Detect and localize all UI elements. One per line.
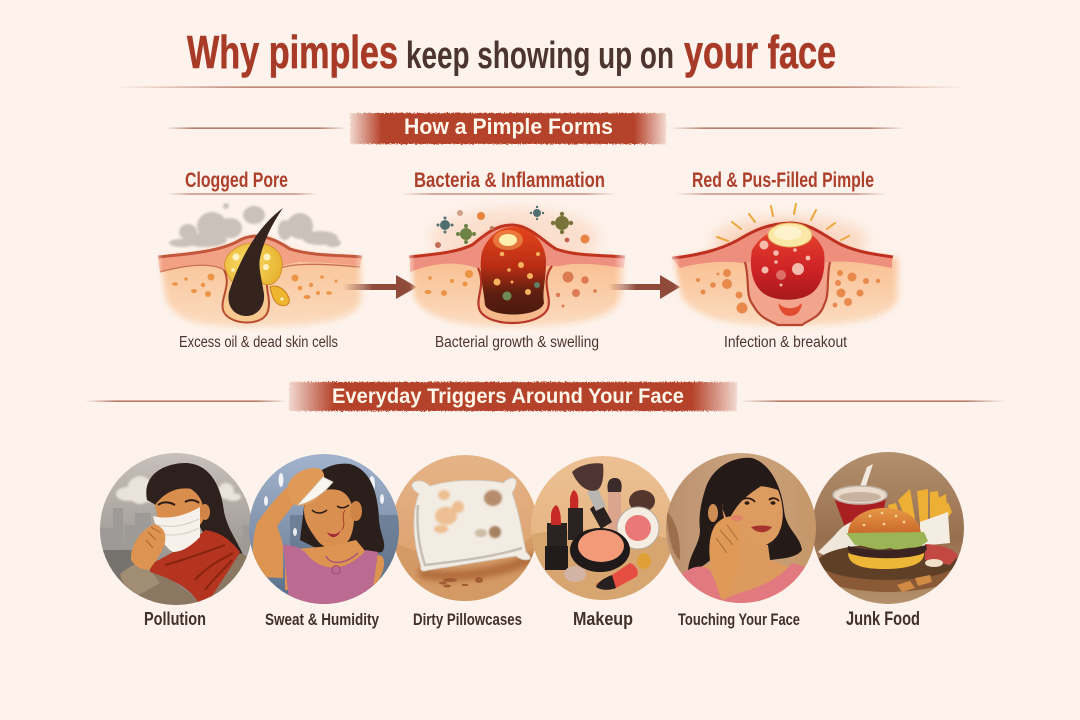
label: Sweat & Humidity <box>265 610 379 629</box>
arrow: bacteria to pimple <box>608 275 680 299</box>
illustration: burger, fries and drink <box>814 452 964 604</box>
section banner: How a Pimple Forms: How a Pimple Forms <box>404 114 613 139</box>
illustration: woman touching her face <box>666 453 816 603</box>
illustration: pus-filled pimple cross-section <box>672 204 900 326</box>
heading: Clogged Pore: Clogged Pore <box>185 169 288 192</box>
label: Junk Food <box>846 609 920 630</box>
section banner: Everyday Triggers Around Your Face <box>85 382 1005 411</box>
section banner: Everyday Triggers Around Your Face: Everyday Triggers Around Your Face <box>332 385 684 408</box>
trigger: touching your face <box>666 453 816 628</box>
title: keep showing up on <box>406 35 674 77</box>
icon: inflammation rays <box>717 204 849 241</box>
trigger: dirty pillowcases <box>396 455 534 628</box>
title: your face <box>684 26 836 78</box>
trigger: pollution <box>100 453 250 625</box>
section banner: How a Pimple Forms <box>165 113 905 144</box>
label: Dirty Pillowcases <box>413 610 522 629</box>
illustration: stained pillow <box>396 455 534 601</box>
trigger: sweat and humidity <box>249 454 399 628</box>
arrow: clogged pore to bacteria <box>343 275 417 299</box>
trigger: junk food <box>814 452 964 625</box>
stage 3: red and pus-filled pimple <box>672 169 900 351</box>
label: Touching Your Face <box>678 610 800 629</box>
illustration: clogged pore skin cross-section <box>158 203 364 327</box>
label: Pollution <box>144 609 206 629</box>
label: Makeup <box>573 609 633 629</box>
illustration: makeup products <box>531 456 670 600</box>
title: Why pimples <box>187 26 398 78</box>
caption: Bacterial growth & swelling <box>435 334 599 351</box>
caption: Excess oil & dead skin cells <box>179 334 338 351</box>
illustration: woman wiping sweat <box>249 454 399 604</box>
heading: Red & Pus-Filled Pimple: Red & Pus-Filled Pimple <box>692 169 874 192</box>
title <box>187 26 836 78</box>
illustration: inflamed pore with bacteria <box>409 206 625 327</box>
trigger: makeup <box>531 456 670 629</box>
caption: Infection & breakout <box>724 334 848 351</box>
illustration: woman with mask in smog <box>100 453 250 605</box>
stage 1: clogged pore <box>158 169 364 351</box>
stage 2: bacteria and inflammation <box>400 169 625 351</box>
heading: Bacteria & Inflammation: Bacteria & Inflammation <box>414 169 605 192</box>
